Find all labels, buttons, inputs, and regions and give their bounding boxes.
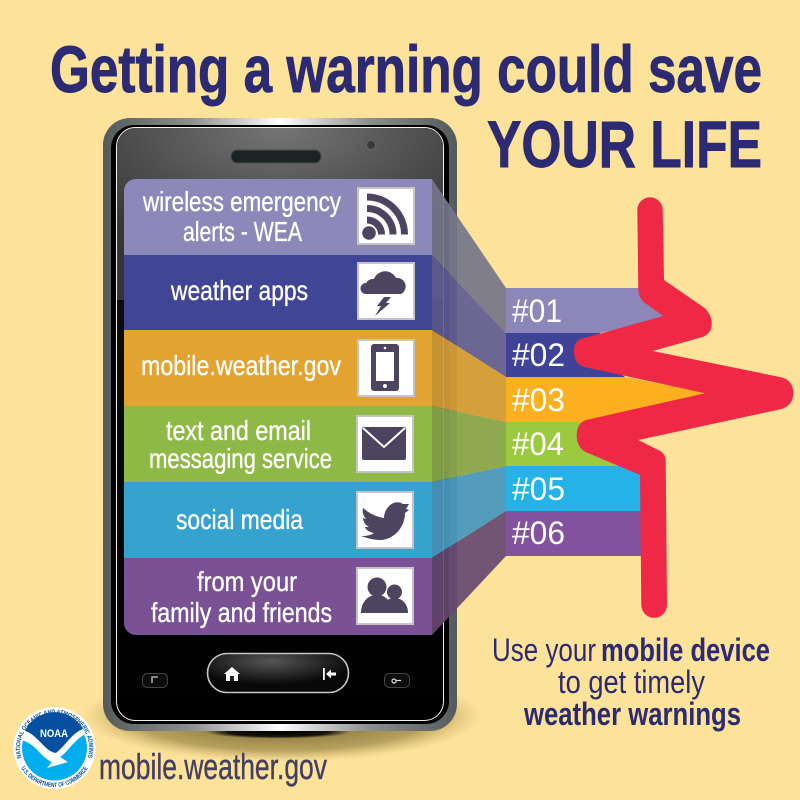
panel: wireless emergency alerts: wireless emergency xyxy=(142,186,341,217)
number tabs: #04 xyxy=(512,426,564,462)
NOAA logo: NOAA xyxy=(40,728,68,740)
NOAA logo xyxy=(14,707,96,789)
caption: weather warnings xyxy=(523,696,741,732)
caption: to get timely xyxy=(558,664,705,700)
panel stack on screen xyxy=(124,179,432,635)
panel: text and email xyxy=(124,406,432,482)
caption: Use your xyxy=(492,632,596,668)
left soft key xyxy=(142,674,168,688)
caption xyxy=(492,632,770,732)
panel: family and friends: family and friends xyxy=(151,597,332,628)
icon: bird xyxy=(361,502,409,540)
speaker xyxy=(231,150,321,163)
number tabs xyxy=(506,288,708,556)
home button xyxy=(208,654,348,692)
NOAA logo: U.S. DEPARTMENT OF COMMERCE xyxy=(22,766,88,787)
icon: envelope xyxy=(362,427,406,460)
number tabs: #02 xyxy=(512,337,565,373)
panel: social media xyxy=(124,482,432,558)
red warning signal line xyxy=(574,197,793,618)
panel: wireless emergency alerts: alerts - WEA xyxy=(183,216,302,247)
NOAA logo: NATIONAL OCEANIC AND ATMOSPHERIC ADMINISTRATION xyxy=(16,710,94,759)
number tabs: #03 xyxy=(512,382,565,418)
icon: smartphone xyxy=(371,344,399,391)
phone body xyxy=(103,118,457,731)
panel: weather apps: weather apps xyxy=(170,275,308,306)
panel: text and email: text and email xyxy=(166,415,311,446)
icon: people xyxy=(361,578,408,613)
perspective connectors xyxy=(432,179,506,635)
phone shadow xyxy=(82,670,482,762)
panel: family and friends: from your xyxy=(197,566,297,597)
number tabs: #05 xyxy=(512,471,565,507)
number tabs: #06 xyxy=(512,515,565,551)
panel: wireless emergency alerts xyxy=(124,179,432,255)
website: mobile.weather.gov xyxy=(99,746,327,787)
panel: mobile.weather.gov xyxy=(124,330,432,406)
icon: storm cloud xyxy=(360,271,406,316)
panel: mobile.weather.gov: mobile.weather.gov xyxy=(141,350,341,381)
panel: family and friends xyxy=(124,558,432,635)
title xyxy=(50,32,762,181)
camera xyxy=(366,140,376,150)
panel: text and email: messaging service xyxy=(149,443,332,474)
right soft key xyxy=(384,674,410,688)
panel: social media: social media xyxy=(176,504,303,535)
panel: weather apps xyxy=(124,255,432,330)
icon: rss xyxy=(362,197,404,240)
number tabs: #01 xyxy=(512,293,562,329)
